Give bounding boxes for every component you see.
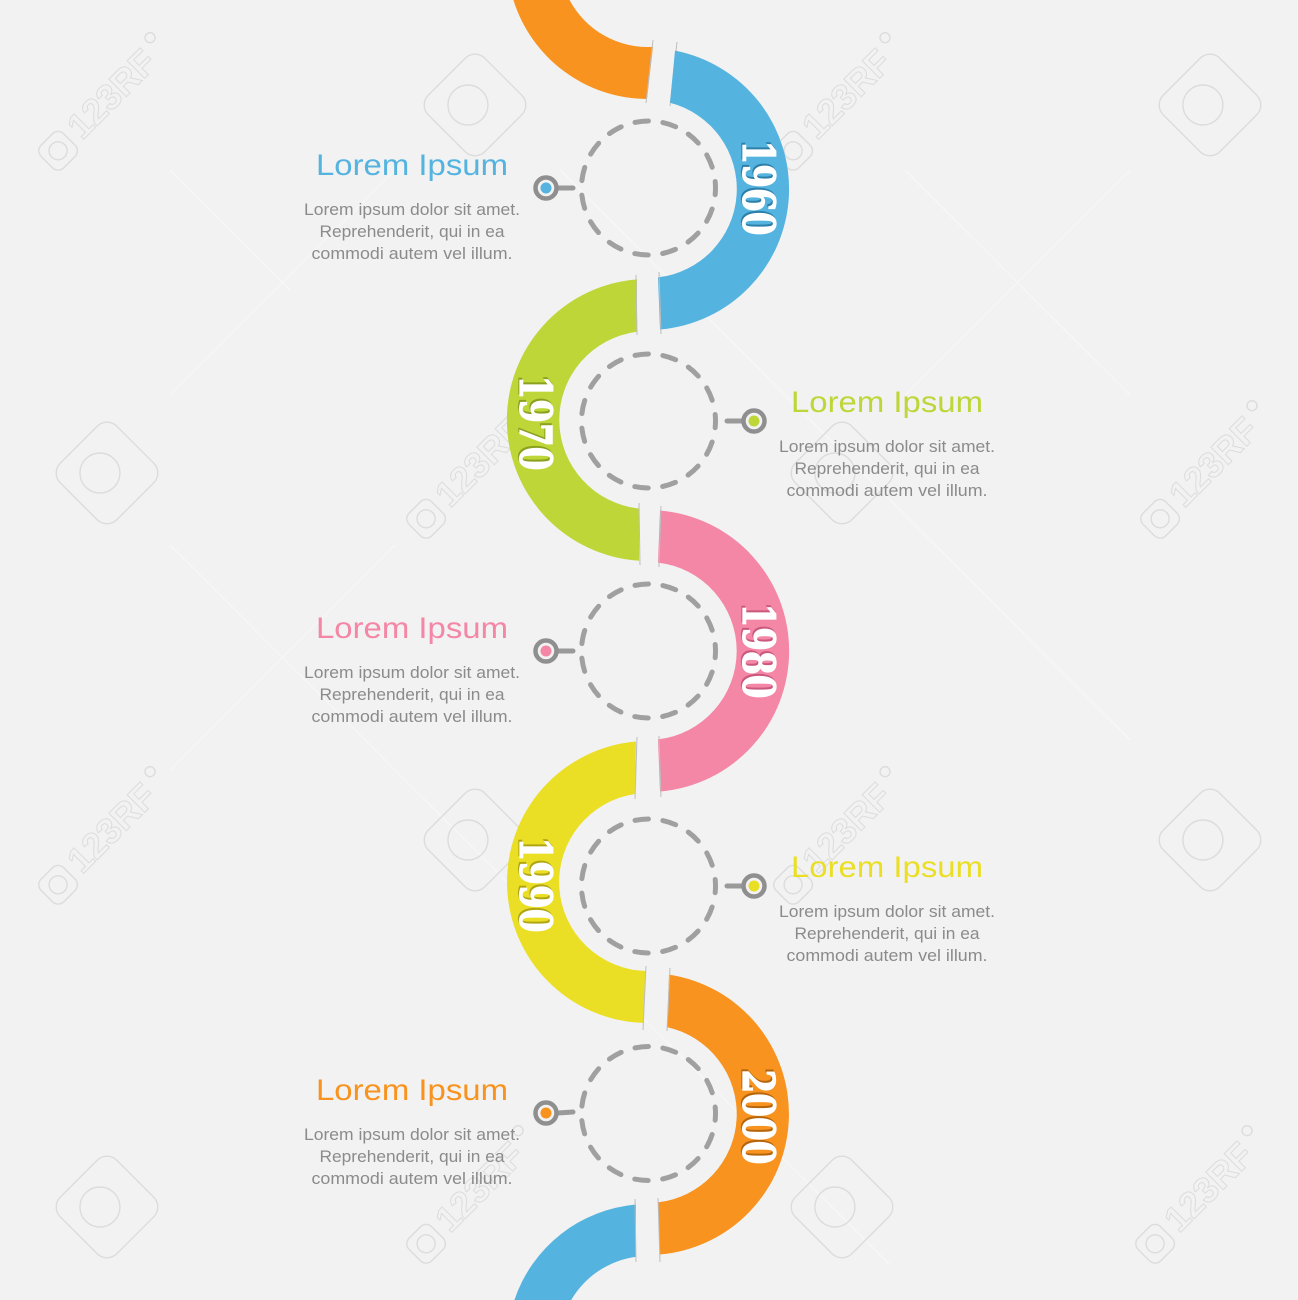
watermark icon 2 <box>1153 48 1267 162</box>
description <box>779 902 995 965</box>
watermark logo 2 <box>766 28 912 175</box>
watermark logo 3: 123RF <box>427 409 532 515</box>
watermark icon 1 <box>418 48 532 162</box>
watermark logo 8 <box>1128 1121 1274 1268</box>
description: commodi autem vel illum. <box>312 1169 512 1188</box>
dashed circle <box>582 584 716 718</box>
watermark logo 4 <box>1133 396 1279 543</box>
description: Reprehenderit, qui in ea <box>320 222 505 241</box>
description: Lorem ipsum dolor sit amet. <box>304 663 520 682</box>
watermark icon 8 <box>785 1150 899 1264</box>
description <box>779 437 995 500</box>
description: Reprehenderit, qui in ea <box>794 924 980 943</box>
watermark icon 7 <box>50 1150 164 1264</box>
panel: 2000 <box>304 975 789 1254</box>
heading: Lorem Ipsum <box>316 1074 508 1107</box>
panel: 1970 <box>507 279 995 561</box>
arc: 2000 <box>658 975 789 1254</box>
dashed circle <box>582 121 716 255</box>
panel: 1960 <box>304 51 789 329</box>
description: commodi autem vel illum. <box>786 481 988 500</box>
description: Reprehenderit, qui in ea <box>794 459 980 478</box>
description: Lorem ipsum dolor sit amet. <box>779 902 995 921</box>
description: commodi autem vel illum. <box>312 707 512 726</box>
dashed circle <box>582 354 716 488</box>
watermark icon 3 <box>50 416 164 530</box>
description: Lorem ipsum dolor sit amet. <box>304 200 520 219</box>
pin <box>536 178 573 198</box>
heading: Lorem Ipsum <box>791 386 983 419</box>
pin <box>727 876 764 896</box>
dashed circle <box>582 1046 716 1180</box>
year: 1980: 1980 <box>732 604 783 698</box>
arc: top orange fragment <box>513 0 677 106</box>
watermark logo 7: 123RF <box>427 1134 532 1240</box>
watermark logo 8: 123RF <box>1156 1134 1261 1240</box>
watermark logo 5 <box>31 762 177 909</box>
year: 1990: 1990 <box>509 838 560 932</box>
watermark logo 3 <box>399 396 545 543</box>
year: 1960: 1960 <box>732 140 783 236</box>
heading: Lorem Ipsum <box>316 612 508 645</box>
watermark logo 1 <box>31 28 177 175</box>
watermark icon 5 <box>418 783 532 897</box>
description: Lorem ipsum dolor sit amet. <box>304 1125 520 1144</box>
watermark logo 6: 123RF <box>794 775 899 881</box>
watermark logo 5: 123RF <box>59 775 164 881</box>
arc: bottom blue fragment <box>514 1204 636 1300</box>
description: Reprehenderit, qui in ea <box>320 1147 505 1166</box>
heading: Lorem Ipsum <box>316 149 508 182</box>
panel: 1980 <box>304 510 789 792</box>
watermark logo 4: 123RF <box>1161 409 1266 515</box>
heading: Lorem Ipsum <box>791 851 983 884</box>
description: Lorem ipsum dolor sit amet. <box>779 437 995 456</box>
year: 1970: 1970 <box>509 376 560 470</box>
watermark icon 4 <box>785 416 899 530</box>
watermark logo 7 <box>399 1121 545 1268</box>
description <box>304 1125 520 1188</box>
gap ticks <box>635 272 670 1262</box>
panel: 1990 <box>507 742 995 1023</box>
description: Reprehenderit, qui in ea <box>320 685 505 704</box>
description: commodi autem vel illum. <box>786 946 988 965</box>
arc: 1980 <box>658 510 789 792</box>
watermark logo 1: 123RF <box>59 41 164 147</box>
watermark logo 6 <box>766 762 912 909</box>
pin <box>536 640 573 662</box>
arc: 1990 <box>507 742 646 1023</box>
pin <box>536 1102 573 1124</box>
watermark icon 6 <box>1153 783 1267 897</box>
pin <box>727 410 764 432</box>
watermark logo 2: 123RF <box>794 41 899 147</box>
description <box>304 663 520 726</box>
description <box>304 200 520 263</box>
year: 2000: 2000 <box>732 1070 783 1164</box>
dashed circle <box>582 819 716 953</box>
description: commodi autem vel illum. <box>312 244 512 263</box>
arc: 1970 <box>507 279 639 561</box>
arc: 1960 <box>658 51 789 329</box>
